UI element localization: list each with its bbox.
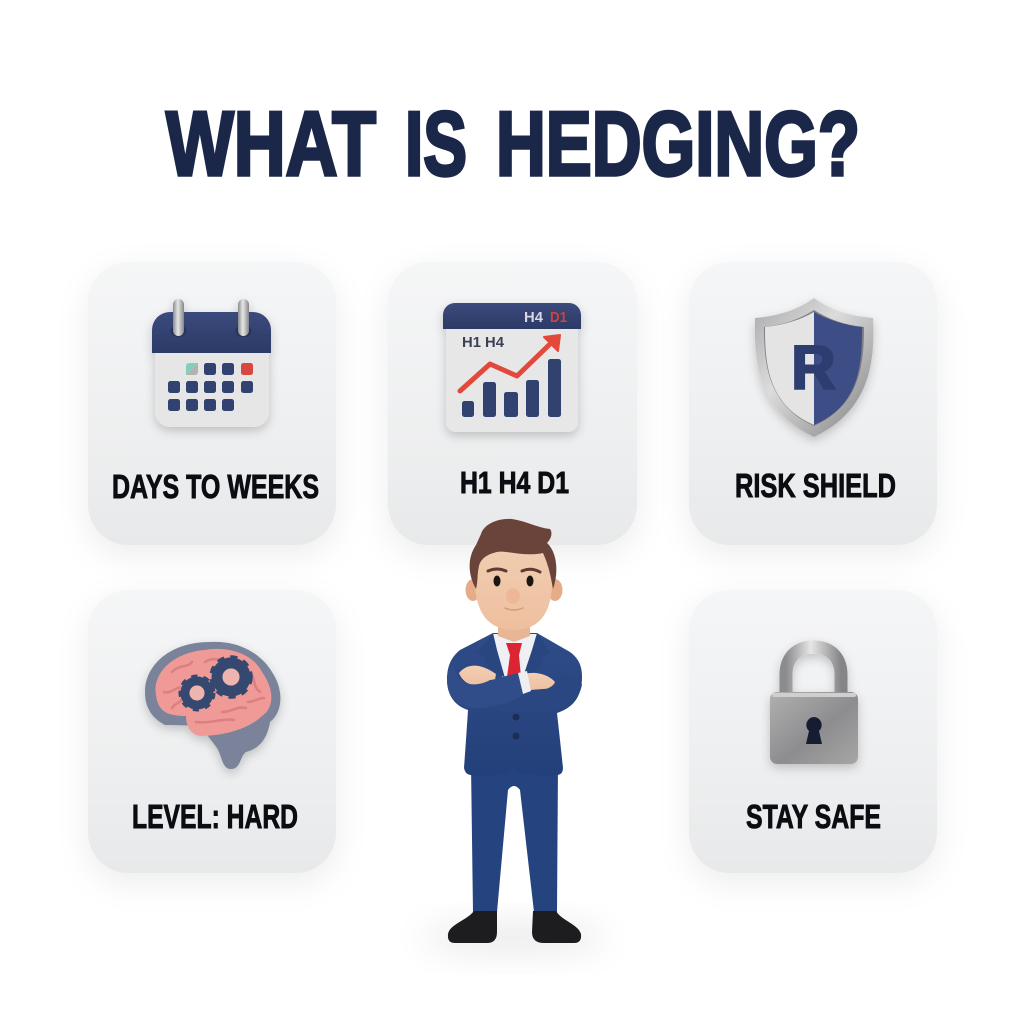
shirt and tie: [492, 634, 537, 680]
icon: calendar: [152, 299, 271, 427]
trousers: [471, 765, 558, 912]
gear: large: [212, 658, 250, 696]
gear: small: [180, 676, 214, 710]
lapels: [478, 633, 550, 680]
icon: shield: R: [791, 334, 836, 403]
panel: level hard: [88, 590, 336, 873]
title: HEDGING?: [496, 94, 860, 195]
jacket: [447, 633, 582, 776]
face details: [488, 569, 540, 610]
title: [166, 94, 860, 195]
character: businessman: [419, 519, 609, 950]
crossed arms: [447, 664, 582, 712]
head: [475, 535, 552, 630]
hair: [470, 519, 556, 589]
jacket buttons: [512, 714, 520, 740]
panel: days to weeks: [88, 262, 336, 545]
icon: chart window: H4: [524, 309, 544, 326]
label: stay safe: STAY SAFE: [746, 798, 881, 835]
ears: [466, 579, 562, 601]
label: days to weeks: DAYS TO WEEKS: [112, 468, 319, 505]
neck: [498, 620, 530, 642]
hands: [459, 666, 555, 691]
icon: chart window: [443, 303, 581, 432]
label: risk shield: RISK SHIELD: [735, 467, 896, 504]
panel: risk shield: [689, 262, 937, 545]
label: h1 h4 d1: H1 H4 D1: [460, 465, 569, 500]
icon: brain with gears: [145, 642, 280, 769]
icon: shield: [755, 298, 873, 437]
icon: chart window: H1 H4: [462, 334, 505, 351]
label: level hard: LEVEL: HARD: [132, 798, 298, 835]
panel: stay safe: [689, 590, 937, 873]
panel: timeframes: [388, 262, 637, 545]
title: WHAT: [166, 94, 376, 195]
shoes: [448, 911, 581, 943]
icon: padlock: [770, 647, 858, 764]
title: IS: [405, 94, 467, 195]
icon: chart window: D1: [550, 309, 567, 326]
